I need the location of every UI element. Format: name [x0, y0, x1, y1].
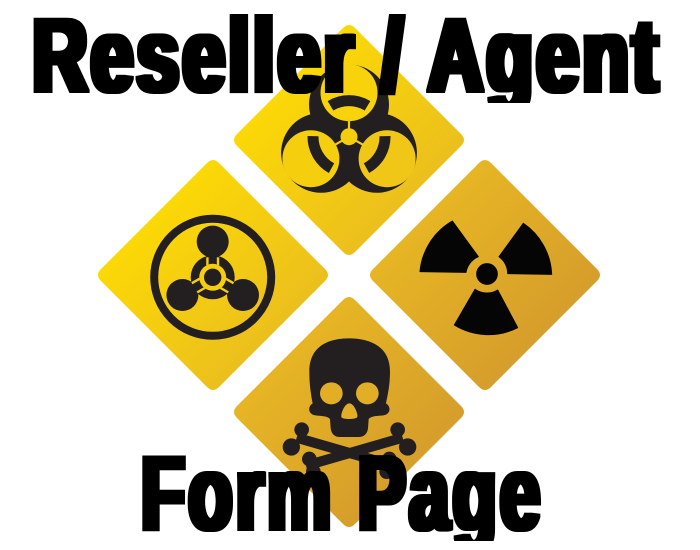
icon: chemical weapon symbol — [154, 219, 271, 336]
panel: chemical weapon diamond — [98, 160, 328, 390]
icon: skull and crossbones — [283, 338, 416, 479]
panel: poison skull diamond — [234, 297, 464, 527]
icon: biohazard symbol — [281, 64, 417, 193]
heading: Reseller / Agent: Reseller / Agent — [32, 0, 661, 114]
panel: radiation diamond — [370, 160, 600, 390]
icon: radiation symbol — [420, 221, 552, 335]
heading: Form Page: Form Page — [141, 435, 543, 550]
panel: biohazard diamond — [234, 25, 464, 255]
